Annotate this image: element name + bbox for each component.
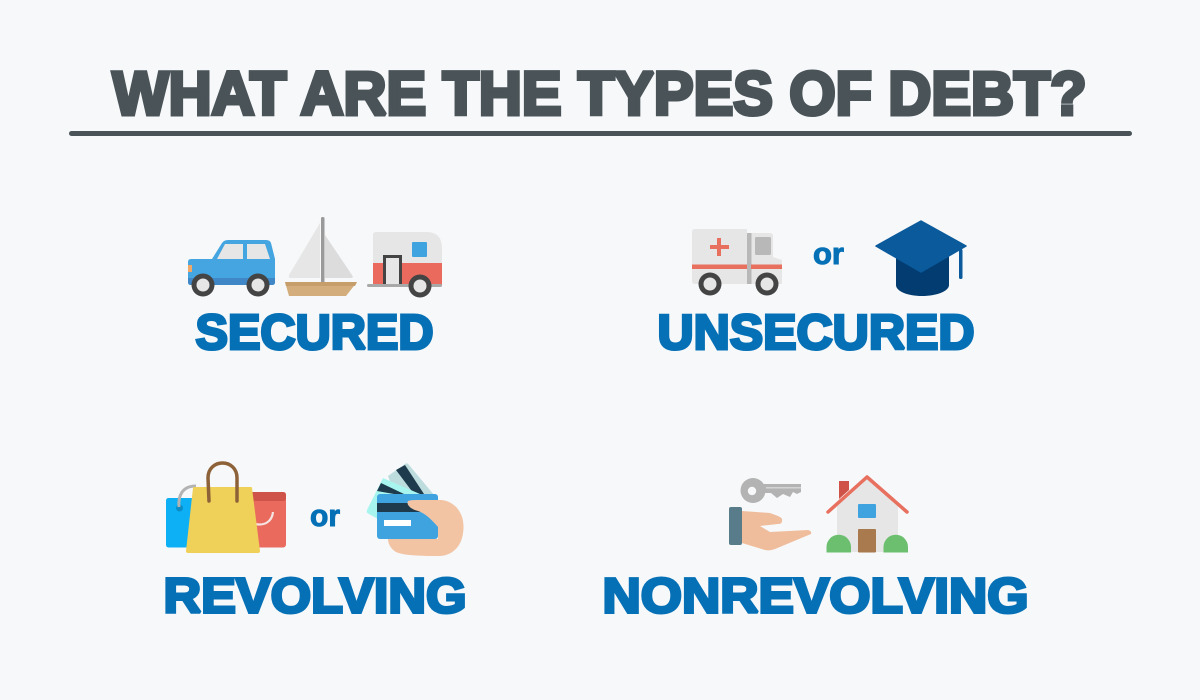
- panel: nonrevolving: [602, 477, 1028, 624]
- icon: graduation cap: [876, 221, 966, 296]
- panel: secured: [188, 217, 442, 360]
- label: secured: SECURED: [196, 306, 434, 360]
- icon: ambulance: [692, 229, 782, 296]
- icon: camper trailer: [367, 232, 442, 298]
- icon: car: [188, 240, 275, 296]
- icon: house: [826, 477, 908, 552]
- label: unsecured: UNSECURED: [658, 306, 974, 360]
- text: or: or: [310, 498, 340, 533]
- icon: hand holding credit cards: [367, 463, 464, 556]
- title: WHAT ARE THE TYPES OF DEBT?: [112, 60, 1086, 128]
- panel: revolving: [164, 463, 466, 624]
- panel: unsecured: [658, 221, 974, 360]
- label: revolving: REVOLVING: [164, 570, 466, 624]
- label: nonrevolving: NONREVOLVING: [602, 570, 1028, 624]
- text: or: or: [813, 236, 844, 271]
- icon: sailboat: [285, 217, 357, 296]
- icon: hand receiving key: [729, 478, 811, 550]
- icon: shopping bags: [166, 463, 286, 553]
